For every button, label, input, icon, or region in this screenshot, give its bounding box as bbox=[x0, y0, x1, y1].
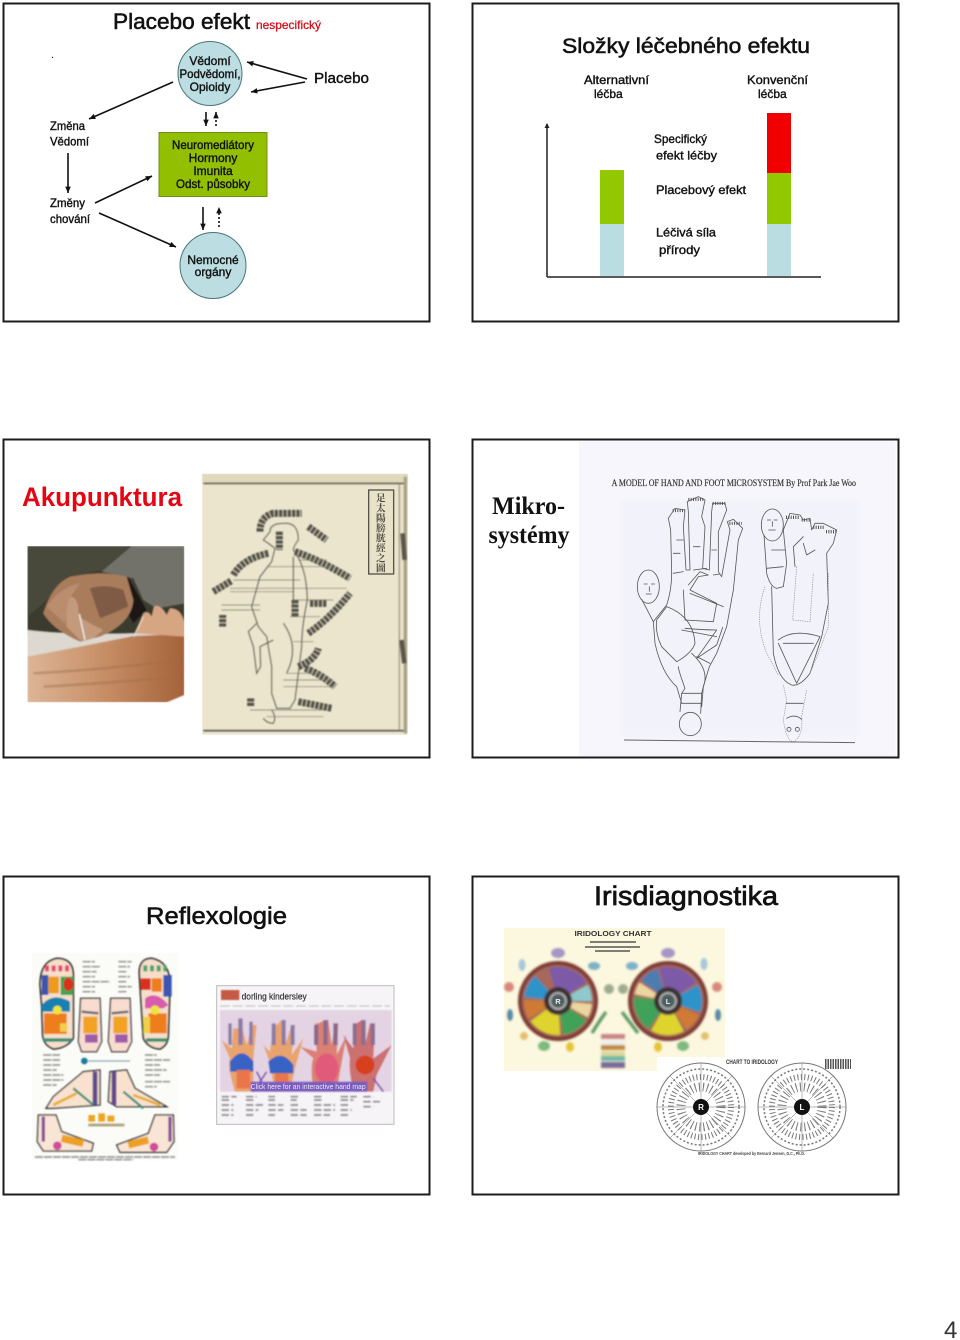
hand page site name: dorling kindersley bbox=[242, 991, 307, 1001]
manuscript vertical title: 太 bbox=[376, 502, 386, 514]
label: Specifický efekt léčby: efekt léčby bbox=[656, 148, 717, 162]
label: nespecifický: nespecifický bbox=[256, 18, 321, 32]
node: Nemocné orgány circle: Nemocné bbox=[187, 253, 239, 267]
heading: Mikro-systémy: Mikro- bbox=[492, 493, 565, 520]
chart logo block bbox=[88, 1113, 114, 1122]
acupoint label clusters bbox=[213, 513, 350, 708]
chart footer text: IRIDOLOGY CHART developed by Bernard Jensen, D.C., Ph.D. bbox=[698, 1151, 805, 1156]
label: Změny chování: chování bbox=[50, 212, 91, 226]
heading: Mikro-systémy: systémy bbox=[488, 522, 570, 549]
box: mediators: Odst. působky bbox=[176, 177, 250, 191]
left iris wheel: L bbox=[666, 997, 671, 1006]
right sole bbox=[139, 958, 172, 1049]
bar: alternative treatment bbox=[600, 170, 624, 276]
label: Konvenční léčba bbox=[747, 73, 809, 101]
label: Konvenční léčba: léčba bbox=[758, 87, 787, 101]
panel: microsystems bbox=[472, 440, 898, 758]
arrow: dotted up from organs bbox=[218, 207, 220, 227]
right monochrome iris bbox=[657, 1063, 745, 1151]
iris chart organ icons bbox=[504, 948, 722, 1068]
heading: Akupunktura: Akupunktura bbox=[22, 482, 183, 512]
label: Změna Vědomí bbox=[50, 119, 90, 148]
label: Konvenční léčba: Konvenční bbox=[747, 73, 809, 87]
fingertip miniatures bbox=[673, 499, 742, 523]
colour chart title: IRIDOLOGY CHART bbox=[574, 929, 652, 938]
left monochrome iris bbox=[758, 1063, 846, 1151]
label: Specifický efekt léčby bbox=[654, 132, 717, 162]
barcode bbox=[825, 1059, 851, 1069]
box: mediators: Hormony bbox=[189, 151, 237, 165]
heading: Irisdiagnostika: Irisdiagnostika bbox=[594, 881, 779, 911]
node: Nemocné orgány circle bbox=[180, 232, 246, 298]
baseline under drawings bbox=[624, 740, 855, 743]
label: Alternativní léčba: Alternativní bbox=[584, 73, 650, 87]
arrow: placebo to lower circle bbox=[251, 82, 305, 92]
heading: Složky léčebného efektu: Složky léčebného efektu bbox=[562, 35, 810, 58]
colour chart title bbox=[574, 929, 652, 951]
label: Alternativní léčba bbox=[584, 73, 650, 101]
heading: Mikro-systémy bbox=[488, 493, 570, 549]
node: Vědomí circle bbox=[178, 42, 242, 106]
monochrome chart title: CHART TO IRIDOLOGY bbox=[726, 1059, 778, 1066]
middle feet bbox=[78, 998, 132, 1052]
panel: components of treatment effect bbox=[472, 4, 898, 322]
manuscript vertical title: 胱 bbox=[376, 532, 386, 544]
heading: Placebo efekt: Placebo efekt bbox=[113, 9, 250, 34]
foot drawing bbox=[760, 509, 837, 742]
arrow: behaviour to organs bbox=[99, 213, 176, 247]
box: mediators: Imunita bbox=[193, 164, 233, 178]
image caption: A MODEL OF HAND AND FOOT MICROSYSTEM By Prof Park Jae Woo bbox=[612, 478, 856, 488]
node: Vědomí circle: Vědomí bbox=[189, 54, 231, 68]
panel: iridology bbox=[472, 876, 898, 1194]
interactive hand map banner: Click here for an interactive hand map bbox=[251, 1082, 366, 1091]
manuscript vertical title: 膀 bbox=[376, 523, 386, 534]
left iris wheel bbox=[628, 961, 708, 1041]
heading: Reflexologie: Reflexologie bbox=[146, 903, 287, 930]
label: Změna Vědomí: Vědomí bbox=[50, 134, 90, 148]
label: Alternativní léčba: léčba bbox=[594, 87, 623, 101]
photo: needle in arm bbox=[27, 546, 184, 702]
side feet bbox=[46, 1070, 167, 1108]
manuscript vertical title: 陽 bbox=[376, 513, 386, 524]
arrow: down to mediators bbox=[205, 112, 207, 126]
toe miniatures bbox=[786, 517, 837, 532]
label: Specifický efekt léčby: Specifický bbox=[654, 132, 707, 146]
right iris wheel bbox=[518, 961, 598, 1041]
lower feet bbox=[37, 1115, 174, 1152]
image: foot reflexology chart bbox=[32, 953, 178, 1160]
image: hand reflexology page bbox=[217, 986, 394, 1124]
label: Změny chování bbox=[50, 196, 91, 226]
arrow: placebo to upper circle bbox=[247, 62, 307, 79]
label: R: R bbox=[698, 1103, 704, 1112]
figure outline bbox=[248, 523, 307, 723]
arrow: consciousness to change bbox=[89, 82, 173, 119]
node: Nemocné orgány circle: orgány bbox=[195, 265, 231, 279]
dot mark: . bbox=[51, 49, 54, 61]
label: Léčivá síla přírody bbox=[656, 226, 716, 257]
manuscript vertical title: 足 bbox=[376, 493, 386, 504]
image: colour iridology chart bbox=[504, 928, 725, 1071]
panel: acupuncture bbox=[4, 440, 430, 758]
label: Placebo: Placebo bbox=[314, 71, 369, 87]
chart: stacked bars bbox=[544, 113, 821, 277]
acupoint leader lines bbox=[222, 560, 347, 717]
right iris wheel: R bbox=[555, 997, 561, 1006]
box: mediators bbox=[159, 132, 267, 196]
label: Léčivá síla přírody: Léčivá síla bbox=[656, 226, 716, 240]
manuscript vertical title: 之 bbox=[376, 552, 386, 564]
arrow: change of consciousness to behaviour bbox=[67, 153, 69, 193]
image: hand and foot microsystem bbox=[579, 441, 896, 756]
four hands bbox=[222, 1018, 392, 1092]
node: Vědomí circle: Opioidy bbox=[190, 80, 230, 94]
arrow: behaviour to mediators bbox=[95, 176, 152, 203]
label: L: L bbox=[800, 1103, 805, 1112]
chart axes bbox=[547, 124, 821, 277]
index columns bbox=[222, 1097, 380, 1115]
image: black and white iridology chart bbox=[657, 1057, 855, 1161]
arrow: down to organs bbox=[202, 207, 204, 230]
node: Vědomí circle: Podvědomí, bbox=[180, 67, 240, 81]
label: Změny chování: Změny bbox=[50, 196, 85, 210]
image: acupuncture manuscript bbox=[202, 474, 408, 735]
box: mediators: Neuromediátory bbox=[172, 138, 254, 152]
label: Placebový efekt: Placebový efekt bbox=[656, 183, 747, 197]
small chart text blocks bbox=[35, 962, 175, 1160]
arrow: dotted up from mediators bbox=[215, 112, 217, 126]
bar: conventional treatment bbox=[767, 113, 791, 276]
left sole bbox=[40, 958, 73, 1049]
label: Změna Vědomí: Změna bbox=[50, 119, 85, 133]
manuscript vertical title: 經 bbox=[376, 542, 386, 554]
label: Léčivá síla přírody: přírody bbox=[659, 243, 700, 257]
hand drawing bbox=[637, 497, 743, 736]
manuscript vertical title: 圖 bbox=[376, 562, 386, 574]
manuscript title box bbox=[369, 490, 394, 574]
panel: reflexology bbox=[4, 876, 430, 1194]
panel: placebo diagram bbox=[4, 4, 430, 322]
